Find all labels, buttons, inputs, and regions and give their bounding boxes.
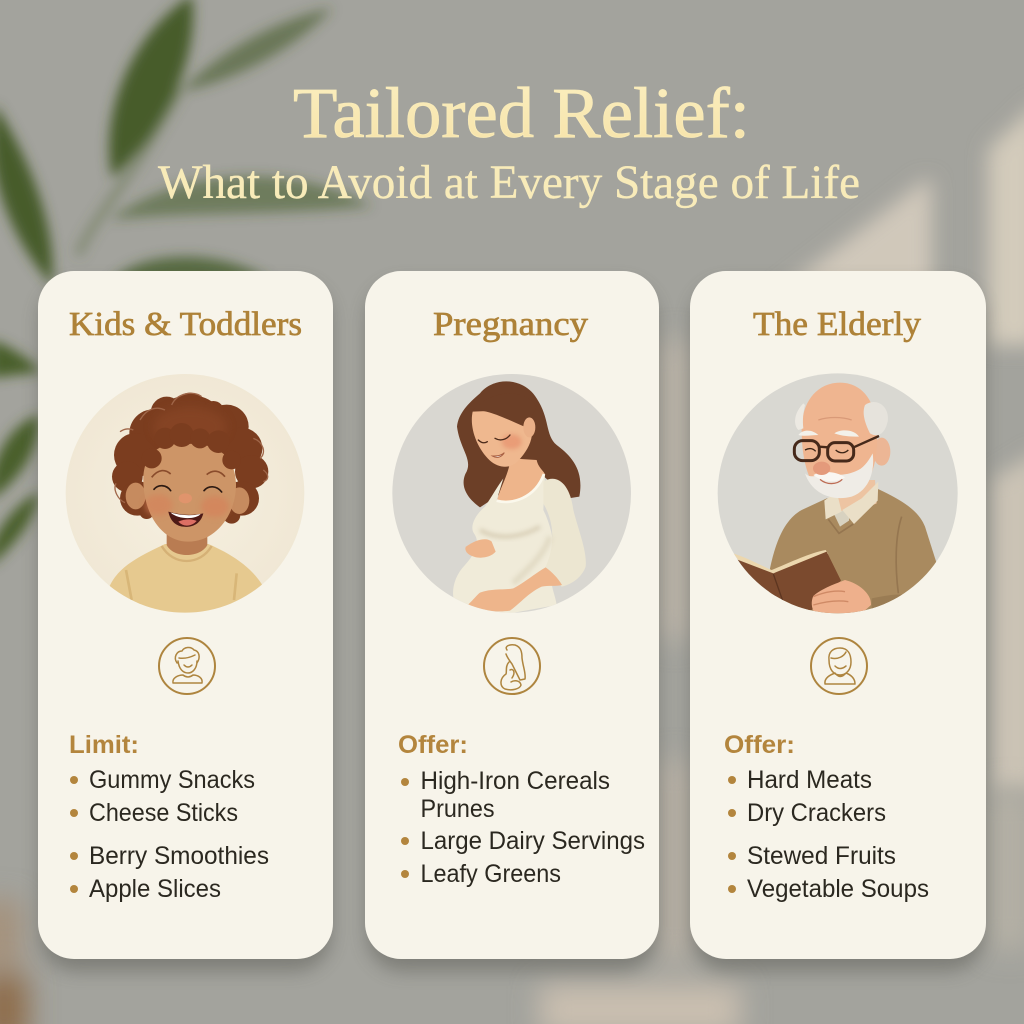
list: offer: Hard Meats bbox=[747, 766, 872, 794]
list: offer: High-Iron Cereals bbox=[420, 767, 610, 795]
list: offer bbox=[398, 731, 645, 888]
list: offer: Offer: bbox=[724, 731, 795, 759]
list: limit: Cheese Sticks bbox=[89, 799, 238, 827]
heading: the elderly: The Elderly bbox=[753, 306, 921, 343]
heading: kids and toddlers: Kids & Toddlers bbox=[69, 306, 302, 343]
icon: child bbox=[159, 638, 215, 694]
list: offer: Large Dairy Servings bbox=[420, 827, 645, 855]
subtitle: What to Avoid at Every Stage of Life bbox=[158, 156, 860, 209]
panel: the elderly bbox=[690, 271, 986, 971]
list: limit: Berry Smoothies bbox=[89, 842, 269, 870]
list: offer: Vegetable Soups bbox=[747, 875, 929, 903]
illustration: laughing child bbox=[66, 374, 304, 613]
panel: pregnancy bbox=[365, 271, 659, 971]
list: offer: Prunes bbox=[420, 795, 494, 823]
list: limit: Apple Slices bbox=[89, 875, 221, 903]
icon: pregnant silhouette bbox=[484, 638, 540, 694]
heading: pregnancy: Pregnancy bbox=[433, 306, 588, 343]
list: offer: Offer: bbox=[398, 731, 468, 759]
list: offer bbox=[724, 731, 929, 903]
icon: elderly person bbox=[811, 638, 867, 694]
illustration: elderly man reading bbox=[718, 373, 958, 613]
list: limit: Limit: bbox=[69, 731, 139, 759]
list: offer: Dry Crackers bbox=[747, 799, 886, 827]
list: offer: Leafy Greens bbox=[420, 860, 561, 888]
illustration: pregnant woman bbox=[392, 374, 631, 614]
panel: kids and toddlers bbox=[38, 271, 333, 971]
list: offer: Stewed Fruits bbox=[747, 842, 896, 870]
title: Tailored Relief: bbox=[293, 73, 750, 153]
list: limit: Gummy Snacks bbox=[89, 766, 255, 794]
list: limit bbox=[69, 731, 269, 903]
